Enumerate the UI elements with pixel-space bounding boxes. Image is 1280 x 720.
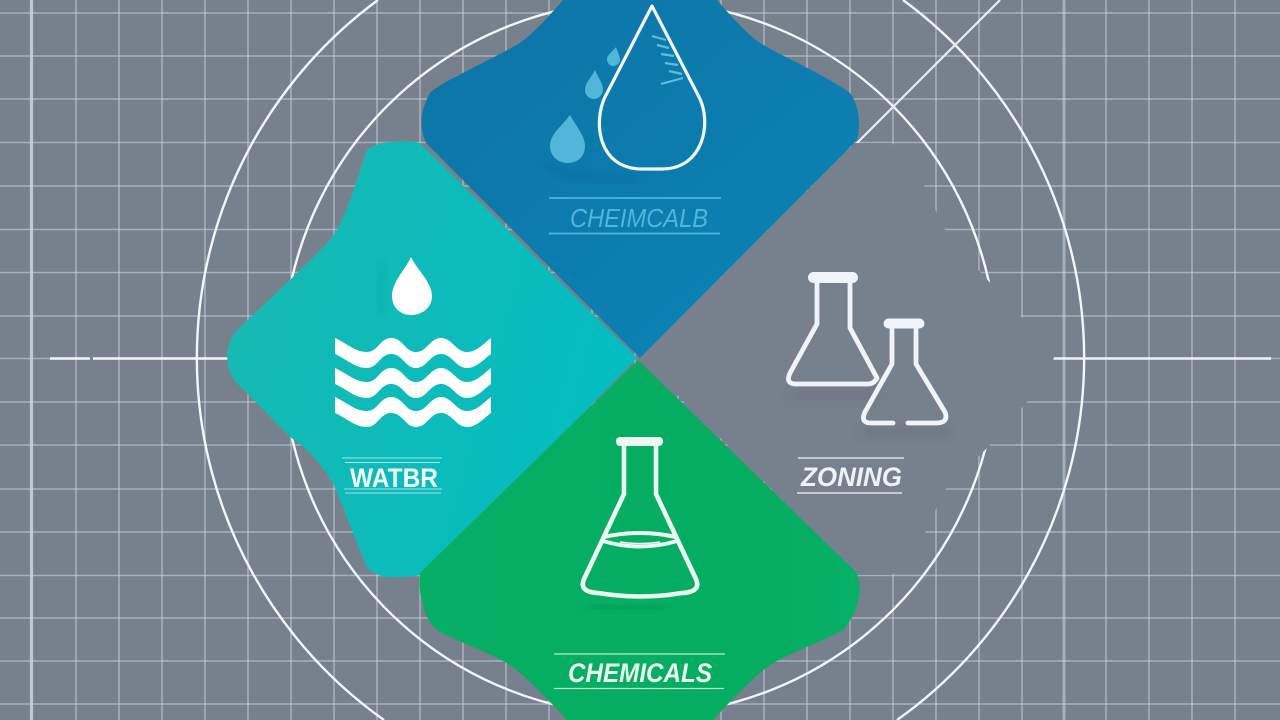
icon: measuring ticks [652,36,683,84]
icon: small light drop [607,47,620,66]
green panel shape [419,360,860,720]
icon: large light drop [550,115,585,163]
icon: water waves [335,338,491,427]
icon: two flasks [788,274,948,432]
label: water: WATBR [350,463,438,493]
panel: water [227,141,637,577]
icon: flask with liquid [583,437,697,608]
icon: large flask [788,274,877,384]
panel: chemicals green [419,360,860,720]
icon: small flask [863,320,946,423]
label: zoning: ZONING [800,462,902,492]
left axis line [50,357,228,360]
icon: droplets with measuring drop [545,6,705,180]
label: chemicals blue: CHEIMCALB [570,203,708,233]
panel: chemicals blue [422,0,859,358]
icon: liquid surface [603,533,677,546]
icon: medium light drop [585,70,603,99]
blue panel shape [422,0,859,358]
concentric circles [197,0,1084,720]
right axis line [1053,357,1271,360]
icon: outlined drop [599,6,705,169]
label: chemicals green: CHEMICALS [568,658,712,688]
icon: water drop [379,257,432,316]
panel: zoning [640,143,1054,575]
zoning panel shape [640,143,1054,575]
diagonal guide line [850,0,1000,150]
teal panel shape [227,141,637,577]
